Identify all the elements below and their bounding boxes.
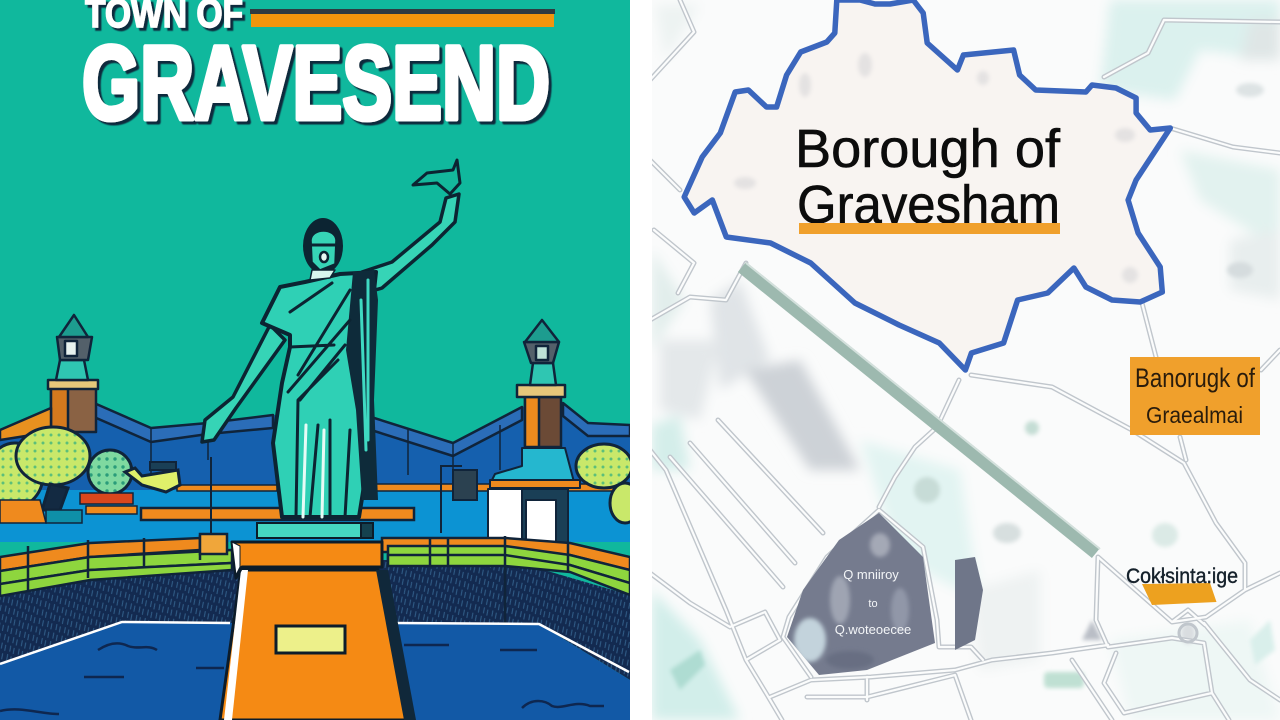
local label with orange marker: Cokłsinta:ige xyxy=(1126,565,1238,588)
panel: map of Borough of Gravesham xyxy=(650,0,1280,720)
embankment wall xyxy=(0,560,630,680)
panel: Town of Gravesend poster xyxy=(0,0,640,720)
urban area label xyxy=(835,567,911,637)
dark urban area xyxy=(787,513,935,675)
title: gravesend: GRAVESEND xyxy=(82,25,550,142)
statue right arm and torch xyxy=(362,194,459,292)
orange label box: Banorugk of xyxy=(1135,363,1255,393)
orange label box: Graealmai xyxy=(1146,402,1243,428)
statue folds xyxy=(288,283,350,517)
pedestal plaque xyxy=(276,626,345,653)
pedestal xyxy=(220,542,416,720)
borough boundary xyxy=(684,0,1170,370)
label: Borough of Gravesham xyxy=(795,119,1061,235)
orange label box xyxy=(1130,357,1260,435)
label: Borough of Gravesham: Gravesham xyxy=(797,175,1060,235)
label: Borough of Gravesham: Borough of xyxy=(795,119,1061,179)
statue left arm xyxy=(202,325,285,442)
statue xyxy=(202,160,460,517)
urban area label: Q mniiroy xyxy=(843,567,899,582)
local label with orange marker xyxy=(1126,565,1238,605)
right tower xyxy=(517,320,565,447)
boundary interior patches xyxy=(734,53,1138,283)
statue dark drape xyxy=(346,270,378,500)
riverside house xyxy=(488,448,580,547)
urban area label: Q.woteoecee xyxy=(835,622,911,637)
map green patches xyxy=(670,83,1275,690)
dark block beside urban area xyxy=(955,557,983,650)
railing: left xyxy=(0,534,232,596)
statue head xyxy=(303,218,343,274)
water xyxy=(0,622,630,720)
statue base xyxy=(257,523,373,538)
bridge backdrop xyxy=(0,403,630,542)
left tower xyxy=(0,315,98,440)
road network xyxy=(650,0,1280,720)
trees left xyxy=(0,427,180,510)
railing: right xyxy=(382,536,630,623)
trees right xyxy=(576,444,640,523)
statue drape highlights xyxy=(361,280,368,450)
water ripples xyxy=(0,643,604,714)
water edge highlight xyxy=(0,622,629,672)
map background xyxy=(652,0,1280,720)
sky background xyxy=(0,0,630,720)
motorway band xyxy=(742,263,1100,553)
map water and terrain tints xyxy=(652,0,1280,720)
urban area label: to xyxy=(868,598,878,610)
statue robe xyxy=(262,272,376,517)
street furniture xyxy=(0,457,477,533)
title rule xyxy=(250,9,555,27)
